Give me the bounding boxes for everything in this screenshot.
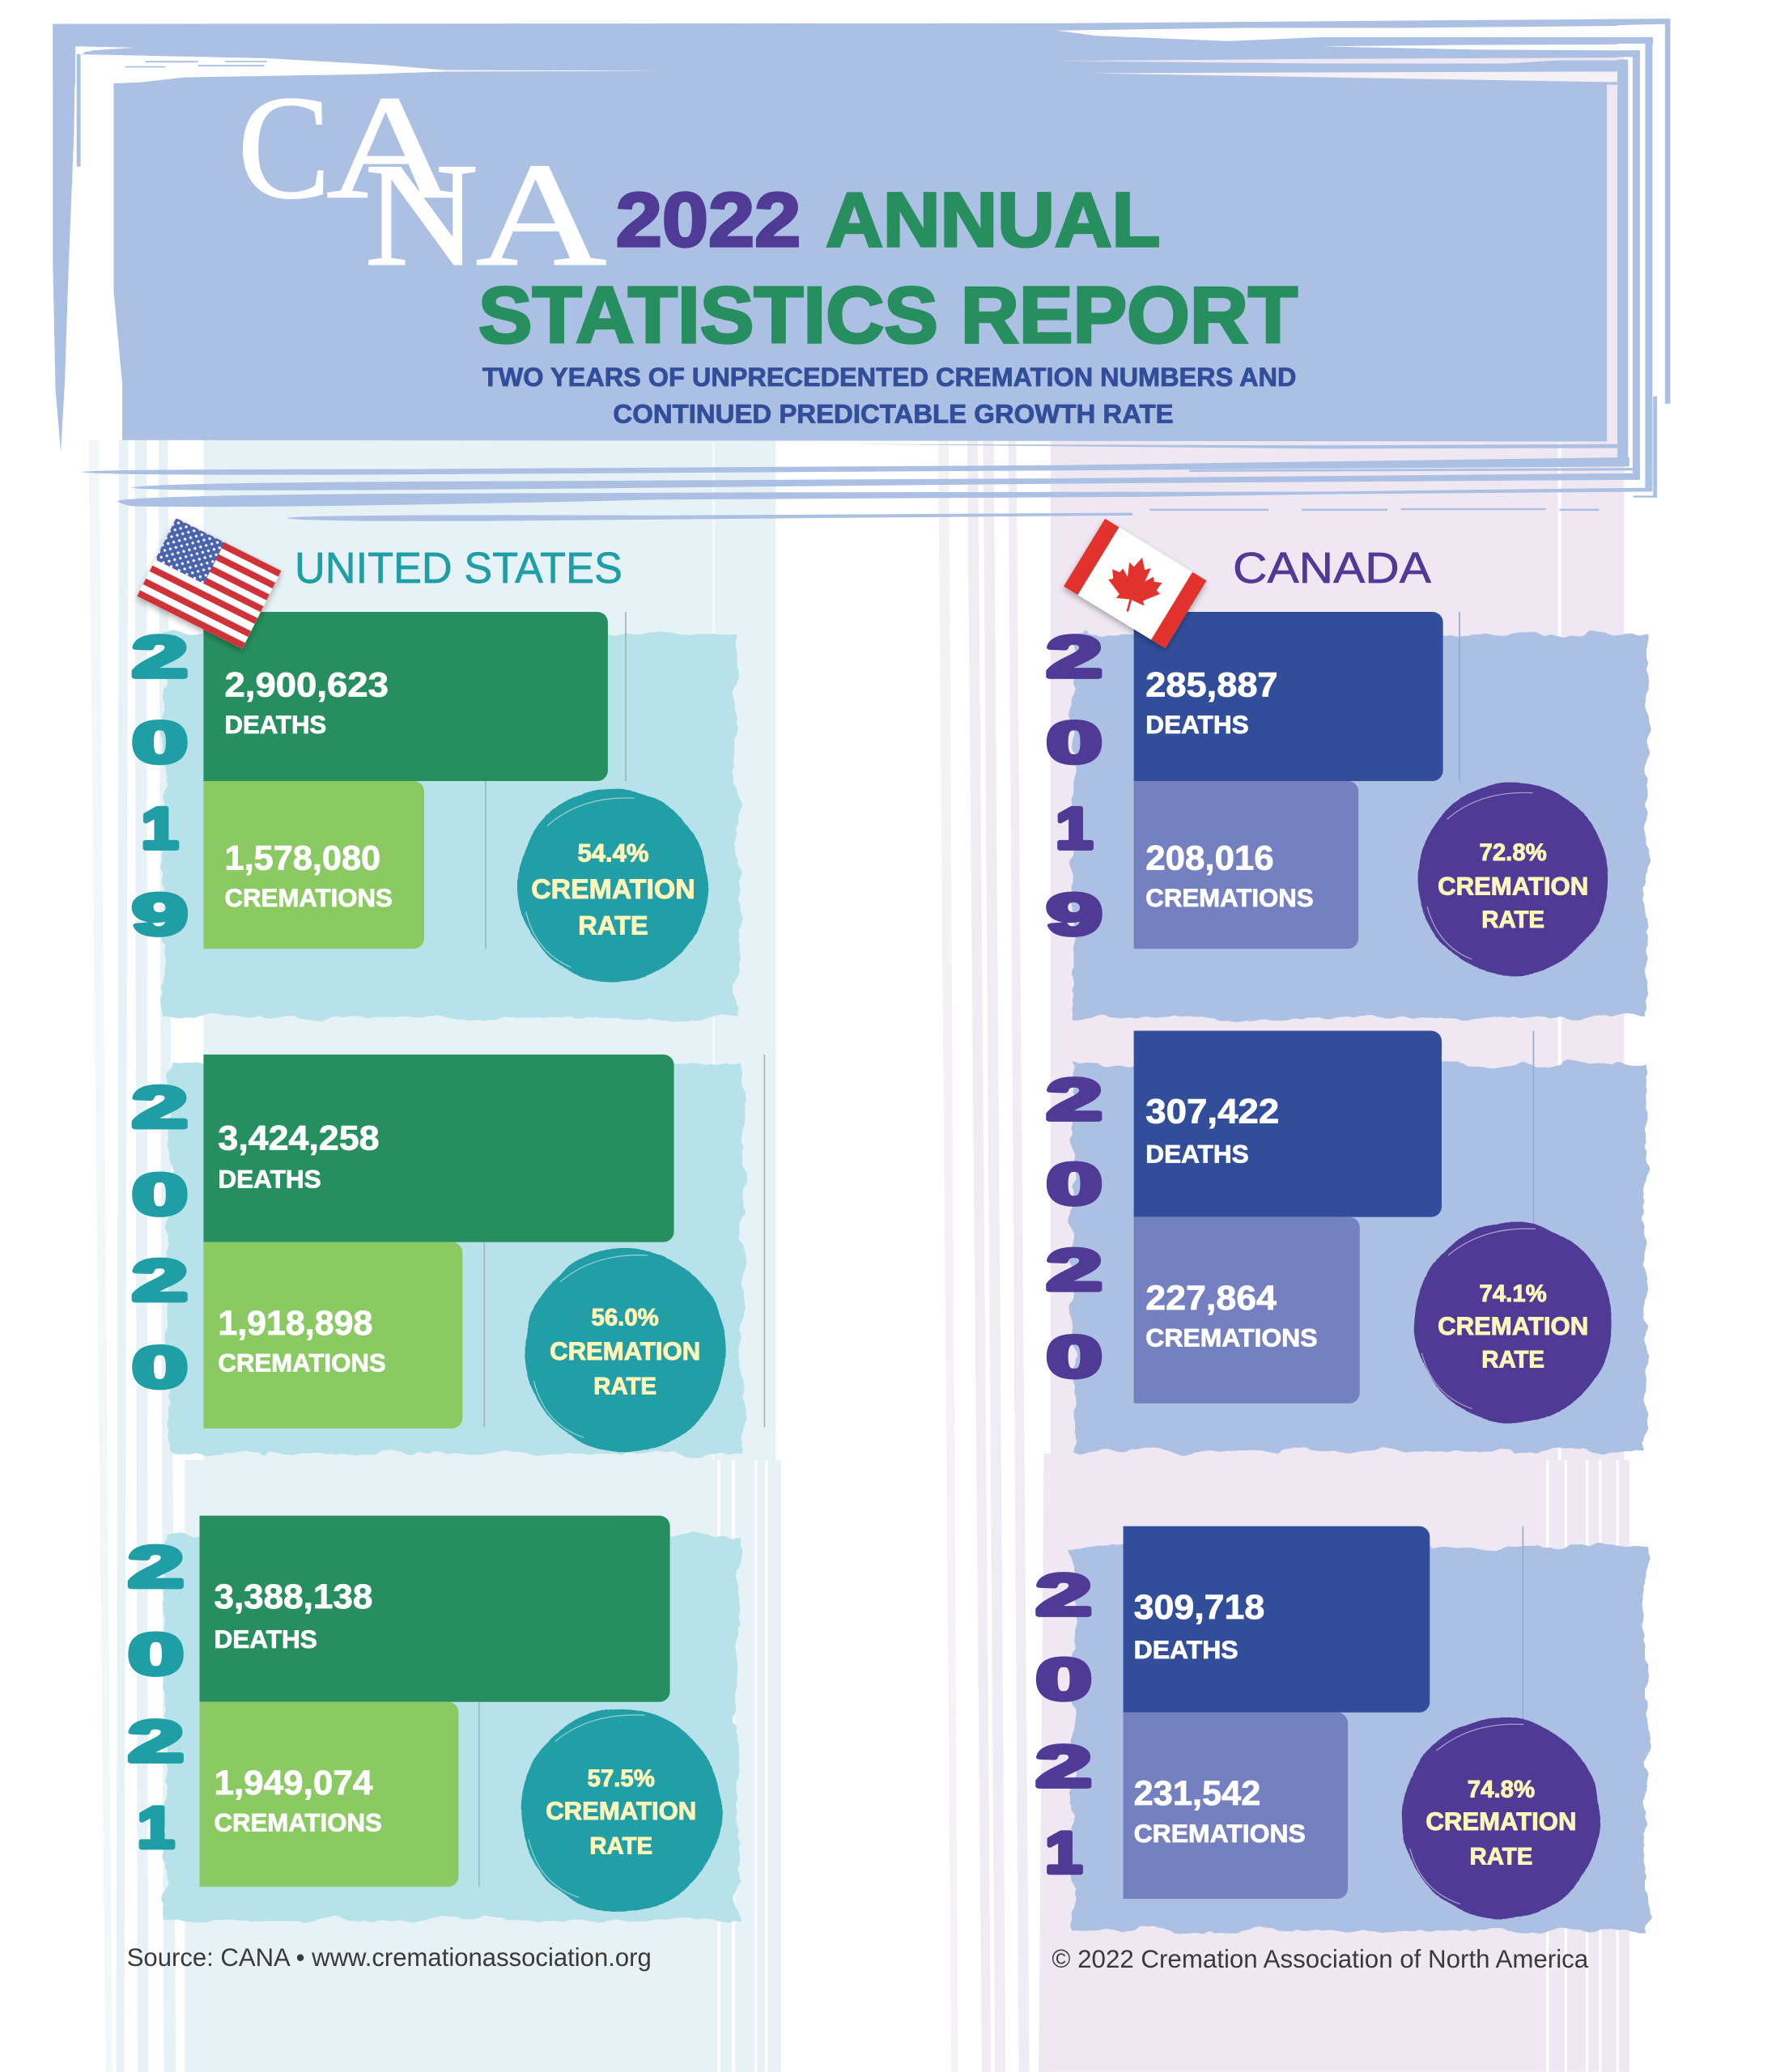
CANA logo: A (476, 133, 606, 297)
deaths figure: DEATHS (1145, 1140, 1249, 1169)
title: 2022 (616, 177, 801, 263)
brush strokes under banner (82, 444, 1648, 521)
source note: Source: CANA • www.cremationassociation.org (127, 1943, 652, 1972)
card: US 2019 (132, 612, 737, 1017)
cremation rate badge (518, 789, 708, 982)
year 2020: 0 (1047, 1325, 1102, 1390)
card: Canada 2019 (1047, 612, 1646, 1017)
year 2020: 2 (1047, 1068, 1102, 1132)
deaths figure (1145, 1093, 1279, 1169)
deaths figure: 3,424,258 (218, 1119, 380, 1157)
year 2021: 2 (128, 1709, 184, 1774)
cremation rate badge: CREMATION (1438, 872, 1588, 900)
year 2019: 1 (1056, 796, 1093, 861)
year 2020: 2 (1047, 1238, 1102, 1302)
year 2019: 0 (132, 711, 188, 775)
year 2019: 2 (132, 625, 188, 690)
deaths figure: 285,887 (1145, 665, 1278, 703)
year 2020: 0 (132, 1162, 188, 1227)
deaths bar (203, 612, 608, 781)
year 2020: 0 (132, 1335, 188, 1400)
year 2021 (1036, 1563, 1091, 1885)
year 2020 (1047, 1068, 1102, 1390)
cremations figure: CREMATIONS (214, 1809, 382, 1837)
cremations bar (1134, 1217, 1360, 1403)
cremations figure (225, 839, 393, 912)
cremation rate badge (1418, 783, 1608, 975)
icon: US flag (137, 518, 281, 649)
cremations bar (203, 781, 424, 949)
cremations figure: CREMATIONS (1134, 1819, 1306, 1848)
deaths bar (203, 1055, 674, 1242)
title: ANNUAL (826, 177, 1160, 263)
year 2020 (132, 1076, 188, 1400)
cremations figure (1145, 1279, 1318, 1352)
year 2021: 1 (1045, 1820, 1082, 1885)
year 2021: 1 (138, 1795, 174, 1860)
card: US 2021 (128, 1516, 737, 1920)
cremation rate badge: CREMATION (1425, 1807, 1577, 1836)
deaths bar (1124, 1526, 1430, 1713)
subtitle: CONTINUED PREDICTABLE GROWTH RATE (613, 399, 1174, 429)
cremations figure (1145, 839, 1314, 912)
title: STATISTICS REPORT (478, 270, 1298, 359)
cremations bar (203, 1242, 462, 1429)
cremation rate badge (520, 1709, 721, 1912)
cremations figure: 1,578,080 (225, 839, 380, 877)
cremations bar (1124, 1713, 1348, 1899)
cremation rate badge: RATE (593, 1373, 656, 1399)
cremations figure (214, 1764, 382, 1837)
deaths figure (225, 665, 389, 739)
cremations figure: 1,918,898 (218, 1304, 372, 1342)
cremations figure (218, 1304, 386, 1378)
deaths figure: 2,900,623 (225, 665, 389, 703)
year 2019: 9 (1047, 882, 1102, 947)
cremations figure: CREMATIONS (225, 884, 393, 912)
cremations figure: CREMATIONS (1145, 1324, 1318, 1352)
cremation rate badge: RATE (1470, 1844, 1532, 1870)
heading: United States: UNITED STATES (295, 544, 622, 592)
cremation rate badge: 56.0% (591, 1305, 659, 1331)
year 2020: 2 (132, 1248, 188, 1313)
cremation rate badge (525, 1249, 725, 1452)
CANA logo: C (238, 65, 330, 229)
card: Canada 2021 (1036, 1526, 1646, 1930)
cremation rate badge: 54.4% (577, 839, 648, 868)
deaths figure (1145, 665, 1278, 739)
cremations figure: CREMATIONS (1145, 884, 1314, 912)
copyright note: © 2022 Cremation Association of North America (1052, 1945, 1589, 1973)
cremations figure: 227,864 (1145, 1279, 1277, 1317)
year 2020: 2 (132, 1076, 188, 1140)
CANA logo: N (365, 133, 478, 297)
heading: Canada: CANADA (1233, 544, 1431, 592)
deaths figure: 309,718 (1134, 1588, 1264, 1626)
cremation rate badge (1414, 1222, 1612, 1423)
cremations bar (199, 1702, 458, 1887)
deaths figure: 3,388,138 (214, 1577, 372, 1616)
year 2021: 0 (1036, 1647, 1091, 1712)
deaths figure (214, 1577, 372, 1654)
deaths bar (1134, 612, 1443, 781)
cremation rate badge: CREMATION (546, 1797, 696, 1825)
cremation rate badge: 74.8% (1468, 1776, 1535, 1802)
deaths figure (218, 1119, 380, 1194)
deaths figure (1134, 1588, 1264, 1664)
cremations figure: CREMATIONS (218, 1349, 386, 1378)
year 2019: 2 (1047, 625, 1102, 690)
cremation rate badge: 74.1% (1479, 1280, 1547, 1307)
year 2020: 0 (1047, 1152, 1102, 1216)
deaths bar (199, 1516, 670, 1702)
deaths figure: DEATHS (1134, 1636, 1239, 1664)
header banner (53, 19, 1670, 498)
year 2019 (132, 625, 188, 947)
year 2021: 2 (1036, 1734, 1091, 1799)
cremation rate badge: CREMATION (1438, 1312, 1588, 1340)
deaths figure: DEATHS (214, 1625, 317, 1654)
deaths bar (1134, 1030, 1442, 1217)
year 2019: 9 (132, 882, 188, 947)
subtitle (482, 362, 1296, 429)
cremation rate badge: RATE (589, 1832, 652, 1859)
cremations figure: 1,949,074 (214, 1764, 373, 1802)
cremations figure: 231,542 (1134, 1774, 1260, 1812)
deaths figure: 307,422 (1145, 1093, 1279, 1131)
year 2021: 2 (128, 1535, 184, 1600)
background column: Canada (938, 53, 1629, 2072)
title (478, 177, 1298, 359)
card: US 2020 (132, 1055, 765, 1454)
cremation rate badge: RATE (1481, 906, 1544, 933)
icon: Canadian flag (1064, 519, 1206, 648)
cremation rate badge: 57.5% (588, 1765, 655, 1792)
cremation rate badge (1402, 1717, 1600, 1918)
cremations figure: 208,016 (1145, 839, 1274, 877)
card: Canada 2020 (1047, 1030, 1646, 1451)
year 2019: 1 (142, 796, 178, 861)
cremation rate badge: RATE (1481, 1347, 1544, 1374)
CANA logo: A (326, 65, 456, 229)
year 2019: 0 (1047, 711, 1102, 775)
cremations bar (1134, 781, 1358, 949)
background column: United States (88, 53, 781, 2072)
deaths figure: DEATHS (1145, 711, 1249, 739)
subtitle: TWO YEARS OF UNPRECEDENTED CREMATION NUMBERS AND (482, 362, 1296, 392)
cremations figure (1134, 1774, 1306, 1848)
year 2019 (1047, 625, 1102, 947)
cremation rate badge: CREMATION (550, 1337, 700, 1365)
year 2021 (128, 1535, 184, 1860)
year 2021: 0 (128, 1622, 184, 1687)
cremation rate badge: 72.8% (1479, 839, 1547, 866)
cremation rate badge: CREMATION (531, 874, 695, 905)
deaths figure: DEATHS (225, 711, 326, 739)
CANA logo (238, 65, 606, 297)
year 2021: 2 (1036, 1563, 1091, 1628)
cremation rate badge: RATE (578, 910, 648, 940)
deaths figure: DEATHS (218, 1166, 321, 1194)
